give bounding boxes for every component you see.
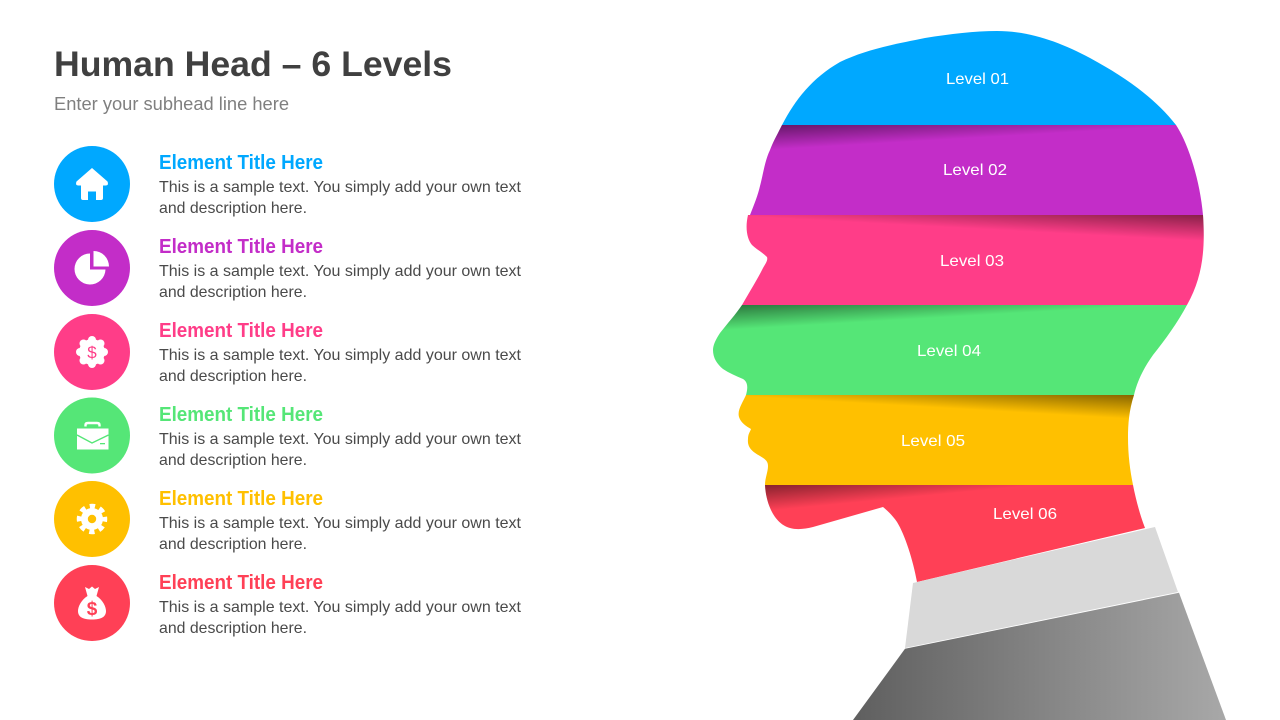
description 5: This is a sample text. You simply add your own text (159, 515, 522, 532)
description 5 (159, 515, 522, 553)
element title 2: Element Title Here (159, 236, 323, 258)
jacket (853, 593, 1226, 720)
level 1 band (782, 31, 1176, 125)
icon: briefcase (54, 398, 130, 474)
list item 1 (54, 146, 522, 222)
level 5 band (739, 395, 1134, 485)
icon: money bag (54, 565, 130, 641)
icon: house (54, 146, 130, 222)
icon: money bag: $ (87, 599, 98, 620)
icon: dollar gear (54, 314, 130, 390)
description 1 (159, 179, 522, 217)
title: Human Head – 6 Levels (54, 45, 452, 84)
level 6 band (765, 485, 1145, 582)
description 6: This is a sample text. You simply add your own text (159, 599, 522, 616)
description 4 (159, 431, 522, 469)
description 2: and description here. (159, 284, 307, 301)
list item 6 (54, 565, 522, 641)
head diagram (713, 31, 1226, 720)
element title 1: Element Title Here (159, 152, 323, 174)
description 6 (159, 599, 522, 637)
list item 2 (54, 230, 522, 306)
description 1: This is a sample text. You simply add your own text (159, 179, 522, 196)
description 5: and description here. (159, 536, 307, 553)
icon: gear (54, 481, 130, 557)
element title 5: Element Title Here (159, 488, 323, 510)
description 1: and description here. (159, 200, 307, 217)
icon: dollar gear: $ (87, 343, 97, 362)
level 3 band (742, 215, 1204, 305)
description 3: This is a sample text. You simply add your own text (159, 347, 522, 364)
collar (905, 527, 1178, 648)
level 2 band: Level 02 (943, 162, 1007, 179)
element title 6: Element Title Here (159, 572, 323, 594)
description 6: and description here. (159, 620, 307, 637)
icon: pie chart (54, 230, 130, 306)
description 3: and description here. (159, 368, 307, 385)
level 4 band: Level 04 (917, 343, 981, 360)
list item 3 (54, 314, 522, 390)
level 5 band: Level 05 (901, 433, 965, 450)
description 2: This is a sample text. You simply add your own text (159, 263, 522, 280)
description 4: This is a sample text. You simply add your own text (159, 431, 522, 448)
list item 4 (54, 398, 522, 474)
level 6 band: Level 06 (993, 506, 1057, 523)
element title 3: Element Title Here (159, 320, 323, 342)
description 4: and description here. (159, 452, 307, 469)
description 2 (159, 263, 522, 301)
level 2 band (750, 125, 1203, 215)
level 3 band: Level 03 (940, 253, 1004, 270)
description 3 (159, 347, 522, 385)
level 4 band (713, 305, 1187, 395)
level 1 band: Level 01 (946, 71, 1009, 88)
element title 4: Element Title Here (159, 404, 323, 426)
subhead: Enter your subhead line here (54, 93, 289, 114)
list item 5 (54, 481, 522, 557)
